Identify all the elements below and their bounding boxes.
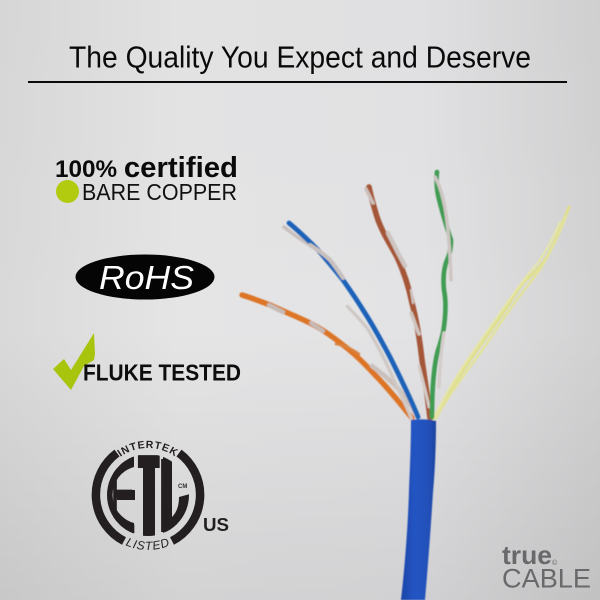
LISTED arc text: LISTED	[126, 538, 168, 550]
photo: twisted wires and blue cable	[242, 172, 569, 600]
logo word: CABLE: CABLE	[502, 564, 591, 594]
ETL letters: E	[110, 434, 136, 557]
badge: fluke tested	[53, 333, 241, 390]
CM mark: CM	[178, 484, 187, 490]
wire: orange pair	[242, 295, 416, 418]
wire: green pair	[432, 172, 451, 417]
logo: true CABLE	[502, 540, 591, 594]
wire: blue pair	[284, 223, 418, 418]
badge: 100% certified bare copper	[55, 152, 238, 205]
label: bare copper: BARE COPPER	[82, 179, 237, 205]
wire: brown pair	[366, 187, 430, 418]
logo: ETL listed	[92, 440, 229, 550]
US mark: US	[203, 514, 229, 535]
RoHS label: RoHS	[99, 259, 194, 296]
title underline	[28, 81, 567, 83]
heading: 100% certified: 100% certified	[55, 152, 238, 184]
logo word: true: true	[502, 540, 552, 570]
ETL letters: T	[138, 431, 160, 561]
ETL letters	[107, 455, 189, 536]
badge: RoHS	[76, 254, 214, 300]
wire: yellow	[433, 207, 569, 420]
ETL letters: L	[157, 436, 185, 555]
RoHS ellipse	[76, 254, 214, 300]
cable jacket	[401, 419, 436, 600]
outer ring arcs	[96, 453, 200, 541]
logo copyright mark: ©	[552, 559, 558, 567]
icon: green dot	[56, 180, 79, 203]
icon: green check mark	[53, 333, 95, 390]
INTERTEK arc text: INTERTEK	[117, 440, 178, 456]
label: fluke tested: FLUKE TESTED	[83, 360, 241, 386]
title: The Quality You Expect and Deserve	[69, 40, 531, 74]
